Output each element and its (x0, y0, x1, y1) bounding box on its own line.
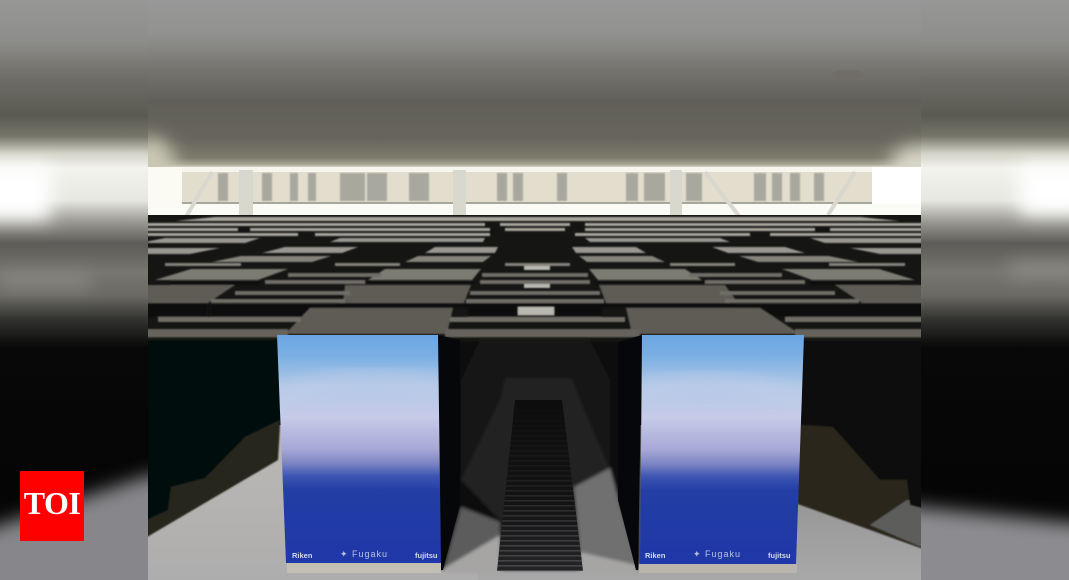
far rows (140, 217, 930, 236)
racks and floor shadows: right (798, 340, 921, 550)
panel name: Fugaku: ✦ Fugaku (693, 549, 741, 559)
right Fugaku panel (635, 335, 810, 573)
mid rows (155, 269, 915, 280)
hall dark base (148, 215, 921, 345)
panel logo: Fujitsu: fujitsu (415, 551, 438, 560)
window strip (148, 167, 921, 217)
cabinet side: left (438, 335, 460, 570)
ceiling fixture (831, 70, 865, 80)
panel name: Fugaku: ✦ Fugaku (340, 549, 388, 559)
floor grille walkway (497, 400, 583, 571)
centre aisle (440, 340, 640, 573)
floor: left (148, 425, 478, 580)
ceiling (148, 0, 921, 168)
panel logo: RIKEN: Riken (645, 551, 666, 560)
left Fugaku panel (270, 335, 445, 573)
blurred side band: left (0, 0, 148, 580)
panel logo: Fujitsu: fujitsu (768, 551, 791, 560)
panel logo: RIKEN: Riken (292, 551, 313, 560)
rack tops (140, 217, 930, 341)
TOI logo badge (20, 471, 84, 541)
blurred side band: right (921, 0, 1069, 580)
ceiling corner glow (148, 126, 921, 167)
racks and floor shadows: left (148, 340, 281, 538)
cabinet side: right (618, 335, 642, 570)
floor: centre and right (478, 425, 921, 580)
TOI logo badge: TOI (24, 485, 80, 521)
